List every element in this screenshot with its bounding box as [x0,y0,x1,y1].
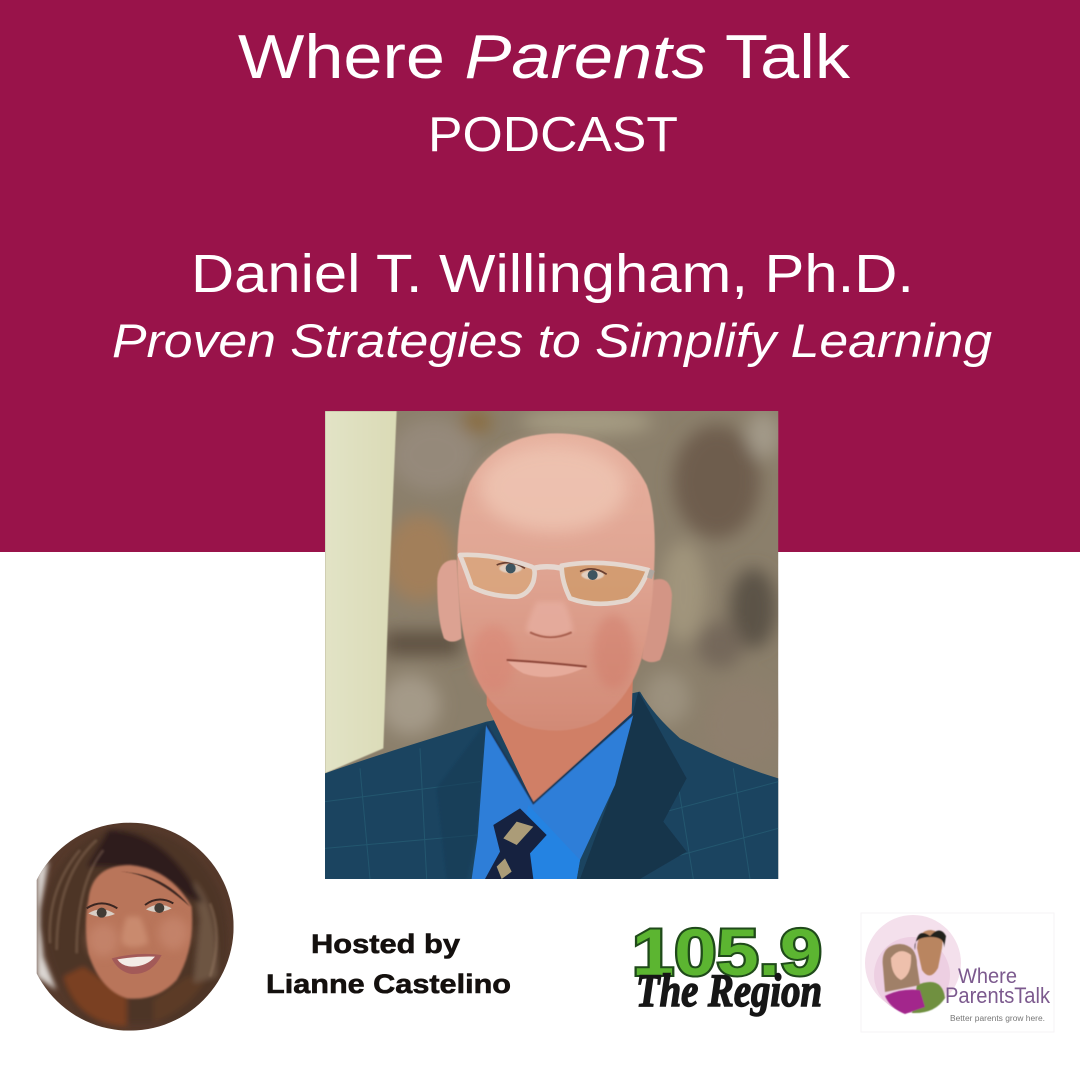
host hair [42,829,228,1027]
logo tagline: Better parents grow here. [950,1014,1045,1023]
host face [86,865,192,999]
glasses [460,555,653,604]
pillar [325,411,397,773]
logo: 105.9 The Region [632,915,822,1017]
shirt [472,715,633,879]
ears [437,560,462,642]
hosted by text [266,929,511,999]
eyes [464,557,645,602]
host backdrop sliver [37,861,57,990]
neck [486,680,633,803]
nose [526,602,573,637]
logo wordmark second line: ParentsTalk [945,983,1051,1008]
logo frequency number: 105.9 [632,915,822,989]
logo figures [883,930,946,1014]
hosted by label: Hosted by [311,929,460,959]
header band [0,0,1080,552]
head [457,433,655,731]
lapels [438,781,480,838]
guest name: Daniel T. Willingham, Ph.D. [191,244,914,304]
logo: Where Parents Talk [861,913,1054,1032]
logo station name: The Region [636,965,822,1017]
subtitle: podcast: PODCAST [428,108,678,162]
suit jacket [325,692,778,879]
title: Where Parents Talk [238,23,851,92]
logo wordmark: Where [958,965,1017,988]
tie [485,808,547,879]
mouth [507,660,587,677]
host name: Lianne Castelino [266,969,511,999]
episode title: Proven Strategies to Simplify Learning [112,314,992,367]
guest photo [325,408,783,879]
host portrait [36,822,234,1031]
